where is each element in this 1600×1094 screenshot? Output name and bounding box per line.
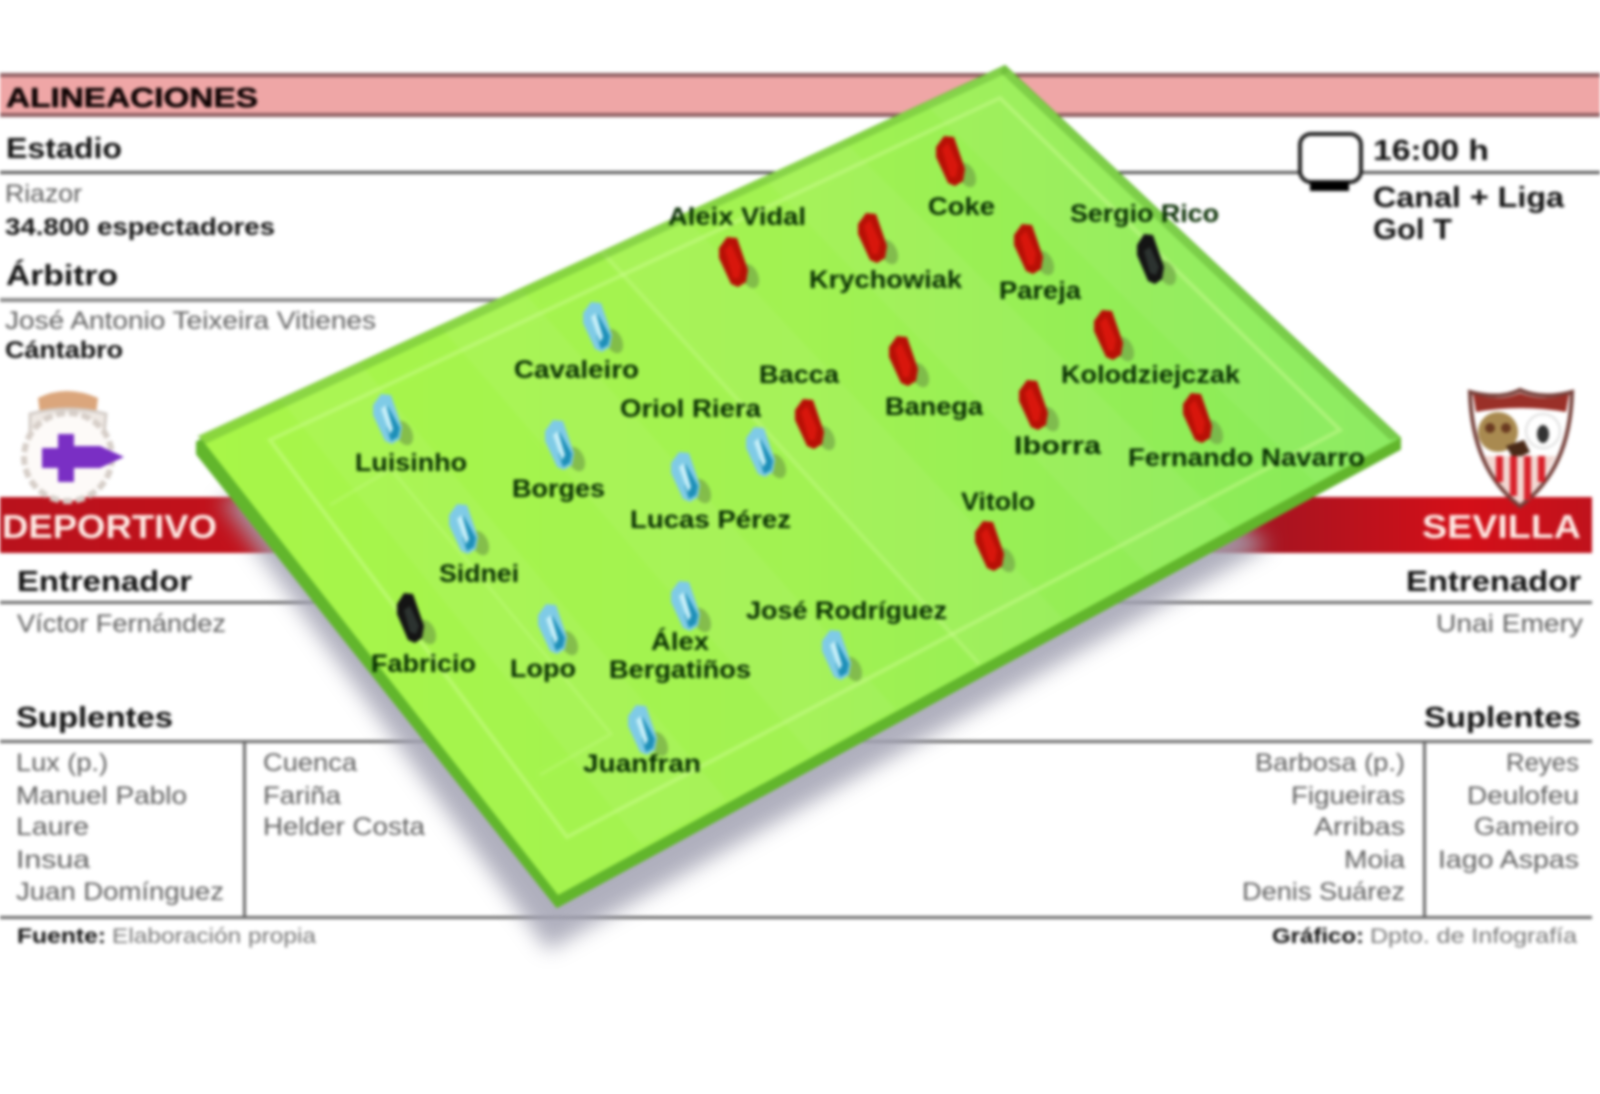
panel: match info: Estadio xyxy=(6,133,122,165)
panel: broadcast: Canal + Liga xyxy=(1373,182,1565,214)
team name: sevilla: SEVILLA xyxy=(1422,508,1581,545)
player: José Rodríguez: José Rodríguez xyxy=(746,597,947,625)
panel: deportivo info: Lux (p.) xyxy=(16,749,108,777)
player: Bacca xyxy=(759,361,840,453)
player: Krychowiak: Krychowiak xyxy=(809,266,962,294)
player: Cavaleiro: Cavaleiro xyxy=(514,356,639,384)
player: Krychowiak xyxy=(809,213,962,294)
pitch shadow xyxy=(220,300,1270,950)
player: Sergio Rico: Sergio Rico xyxy=(1070,200,1219,228)
panel: broadcast: 16:00 h xyxy=(1373,135,1489,167)
player: Oriol Riera: Oriol Riera xyxy=(620,395,762,423)
panel: sevilla info xyxy=(800,566,1592,917)
title bar: alineaciones xyxy=(0,73,1600,117)
panel: deportivo info: Cuenca xyxy=(263,749,357,777)
player: Álex Bergatiños: Bergatiños xyxy=(609,656,751,684)
footer: Elaboración propia xyxy=(112,925,316,948)
panel: match info xyxy=(0,133,1600,364)
panel: deportivo info: Fariña xyxy=(263,782,341,810)
player: Banega xyxy=(885,336,984,421)
panel: match info: José Antonio Teixeira Vitienes xyxy=(5,307,376,335)
panel: sevilla info: Barbosa (p.) xyxy=(1255,749,1405,777)
title bar: alineaciones: ALINEACIONES xyxy=(6,82,258,113)
player: Fernando Navarro: Fernando Navarro xyxy=(1128,444,1365,472)
panel: sevilla info: Iago Aspas xyxy=(1438,846,1579,874)
panel: match info: Árbitro xyxy=(6,258,118,292)
panel: sevilla info: Suplentes xyxy=(1424,702,1581,734)
player: Oriol Riera xyxy=(620,395,790,481)
player: Banega: Banega xyxy=(885,393,984,421)
panel: broadcast xyxy=(1300,134,1565,246)
player: Fabricio xyxy=(371,593,476,678)
panel: deportivo info: Insua xyxy=(16,846,90,874)
player: Sidnei: Sidnei xyxy=(439,560,519,588)
panel: deportivo info: Helder Costa xyxy=(263,813,425,841)
crest: sevilla xyxy=(1470,390,1572,506)
player: Iborra xyxy=(1014,380,1102,460)
panel: deportivo info: Laure xyxy=(16,813,89,841)
panel: sevilla info: Denis Suárez xyxy=(1242,878,1405,906)
panel: sevilla info: Deulofeu xyxy=(1467,782,1579,810)
player: Vitolo xyxy=(961,488,1035,575)
player: Álex Bergatiños: Álex xyxy=(651,627,709,656)
panel: sevilla info: Figueiras xyxy=(1291,782,1405,810)
panel: sevilla info: Unai Emery xyxy=(1436,610,1584,638)
crest: deportivo xyxy=(24,391,124,501)
player: Luisinho xyxy=(355,394,467,477)
panel: sevilla info: Entrenador xyxy=(1406,566,1581,598)
player: Lopo: Lopo xyxy=(510,655,576,683)
player: Pareja: Pareja xyxy=(999,277,1082,305)
player: Coke: Coke xyxy=(928,193,995,221)
player: Bacca: Bacca xyxy=(759,361,840,389)
panel: sevilla info: Reyes xyxy=(1506,749,1579,777)
player: Álex Bergatiños xyxy=(609,581,751,684)
footer: Gráfico: xyxy=(1272,925,1364,948)
panel: deportivo info xyxy=(0,566,560,917)
player: Fabricio: Fabricio xyxy=(371,650,476,678)
panel: match info: Cántabro xyxy=(5,337,123,364)
panel: deportivo info: Suplentes xyxy=(16,702,173,734)
panel: match info: Riazor xyxy=(5,180,82,208)
player: Aleix Vidal: Aleix Vidal xyxy=(668,203,806,231)
football pitch xyxy=(197,66,1400,907)
panel: broadcast: Gol T xyxy=(1373,214,1452,246)
panel: sevilla info: Moia xyxy=(1344,846,1405,874)
player: Juanfran: Juanfran xyxy=(583,750,701,778)
panel: deportivo info: Víctor Fernández xyxy=(17,610,226,638)
panel: sevilla info: Gameiro xyxy=(1474,813,1579,841)
player: Lucas Pérez: Lucas Pérez xyxy=(630,506,791,534)
player: Kolodziejczak: Kolodziejczak xyxy=(1061,361,1240,389)
panel: deportivo info: Entrenador xyxy=(17,566,192,598)
player: Juanfran xyxy=(583,705,701,778)
panel: match info: 34.800 espectadores xyxy=(5,214,275,241)
footer: Dpto. de Infografía xyxy=(1370,925,1577,948)
panel: sevilla info: Arribas xyxy=(1314,813,1405,841)
player: Aleix Vidal xyxy=(668,203,806,291)
player: Borges: Borges xyxy=(512,475,605,503)
player: Pareja xyxy=(999,224,1082,305)
player: Cavaleiro xyxy=(514,302,639,384)
player: Luisinho: Luisinho xyxy=(355,449,467,477)
player: Sergio Rico xyxy=(1070,200,1219,288)
player: José Rodríguez xyxy=(746,597,947,684)
team bars xyxy=(0,497,1592,553)
footer xyxy=(0,916,1592,948)
player: Fernando Navarro xyxy=(1128,393,1365,472)
player: Vitolo: Vitolo xyxy=(961,488,1035,516)
footer: Fuente: xyxy=(17,925,106,948)
player: Coke xyxy=(928,136,995,221)
panel: deportivo info: Juan Domínguez xyxy=(16,878,224,906)
player: Kolodziejczak xyxy=(1061,310,1240,389)
player: Lopo xyxy=(510,604,582,683)
player: Iborra: Iborra xyxy=(1014,432,1102,460)
team name: deportivo: DEPORTIVO xyxy=(2,508,217,545)
player: Sidnei xyxy=(439,504,519,588)
panel: deportivo info: Manuel Pablo xyxy=(16,782,187,810)
player: Lucas Pérez xyxy=(630,452,791,534)
player: Borges xyxy=(512,420,605,503)
